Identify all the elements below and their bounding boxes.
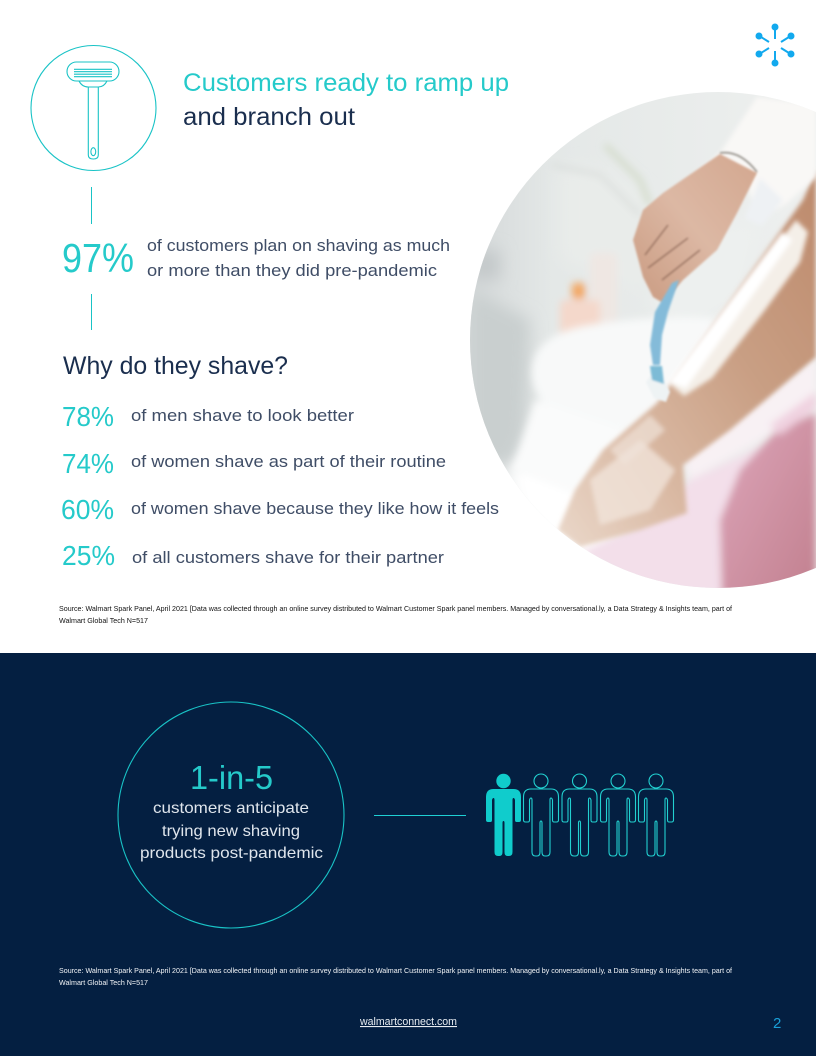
source note top <box>59 604 733 625</box>
stat: 97%: 97% <box>62 235 134 281</box>
title: and branch out <box>183 103 355 131</box>
stat: 74%: of women shave as part of their routine <box>131 453 446 471</box>
panel: dark footer band <box>0 653 816 1056</box>
stat: 60%: of women shave because they like how it feels <box>131 500 499 518</box>
source note top: Walmart Global Tech N=517 <box>59 616 148 625</box>
stat: 25% <box>62 540 445 571</box>
photo: woman shaving her leg <box>465 90 816 595</box>
stat: 97%: or more than they did pre-pandemic <box>147 261 438 280</box>
callout: 1-in-5 circle: trying new shaving <box>162 823 300 840</box>
title <box>183 69 509 131</box>
connector line top <box>90 187 92 224</box>
source note top: Source: Walmart Spark Panel, April 2021 [Data was collected through an online survey distributed to Walmart Customer Spark panel members. Managed by conversational.ly, a Data Strategy & Insights team, part of <box>59 604 733 613</box>
stat: 60%: 60% <box>61 494 114 525</box>
callout: 1-in-5 circle <box>118 702 344 928</box>
stat: 97% <box>62 235 450 281</box>
stat: 25%: 25% <box>62 540 115 571</box>
callout: 1-in-5 circle: customers anticipate <box>153 800 309 817</box>
source note bottom: Source: Walmart Spark Panel, April 2021 [Data was collected through an online survey distributed to Walmart Customer Spark panel members. Managed by conversational.ly, a Data Strategy & Insights team, part of <box>59 966 733 975</box>
callout: 1-in-5 circle: products post-pandemic <box>140 845 323 862</box>
footer link: walmartconnect.com <box>359 1016 457 1028</box>
stat: 97%: of customers plan on shaving as much <box>147 236 450 255</box>
page number: 2 <box>773 1015 781 1032</box>
stat: 74%: 74% <box>62 448 114 479</box>
heading: why do they shave: Why do they shave? <box>63 352 288 380</box>
stat: 74% <box>62 448 446 479</box>
connector line bottom <box>90 294 92 330</box>
title: Customers ready to ramp up <box>183 69 509 97</box>
source note bottom: Walmart Global Tech N=517 <box>59 978 148 987</box>
source note bottom <box>59 966 733 987</box>
connector line to people <box>374 814 466 816</box>
icon: razor in circle <box>31 46 156 170</box>
stat: 78% <box>62 401 355 432</box>
stat: 78%: of men shave to look better <box>131 407 355 425</box>
callout: 1-in-5 circle: 1-in-5 <box>190 759 273 796</box>
icon: five people, one filled <box>486 774 674 856</box>
stat: 60% <box>61 494 499 525</box>
logo: spark <box>756 24 794 66</box>
stat: 78%: 78% <box>62 401 114 432</box>
stat: 25%: of all customers shave for their partner <box>132 549 445 567</box>
